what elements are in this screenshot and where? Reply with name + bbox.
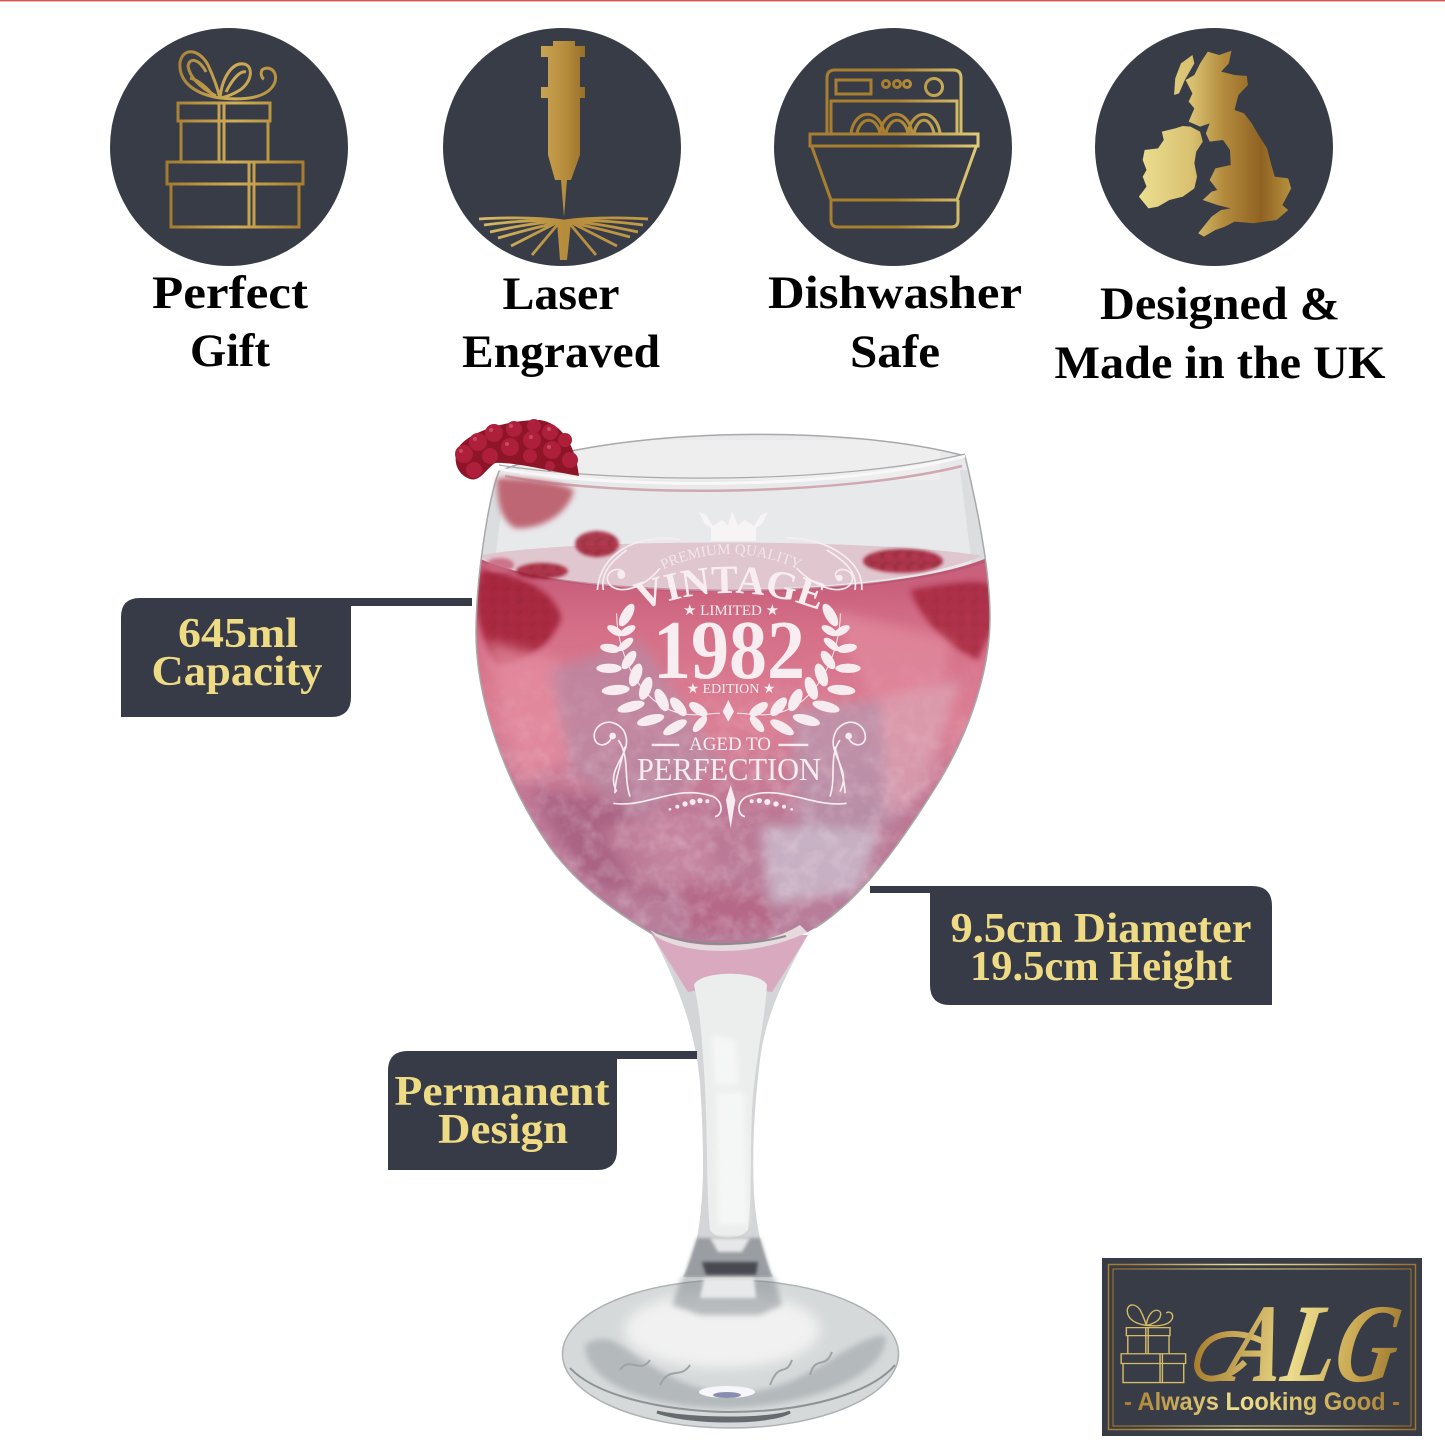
icon: map of UK and Ireland — [1139, 51, 1291, 237]
callout: 645ml capacity — [121, 598, 472, 717]
badge: perfect gift — [110, 28, 348, 266]
stem — [652, 935, 808, 1277]
floating raspberries — [486, 531, 943, 579]
engraved text: VINTAGE — [632, 566, 824, 610]
label: Laser Engraved — [462, 268, 660, 378]
label: Designed and Made in the UK — [1054, 278, 1386, 389]
callout: permanent design: Design — [438, 1107, 568, 1153]
bowl — [470, 425, 1000, 965]
callout: diameter and height: 19.5cm Height — [970, 944, 1232, 990]
engraved text: AGED TO — [689, 734, 771, 755]
raspberry on the rim — [455, 419, 579, 528]
logo gift icon — [1121, 1305, 1186, 1383]
engraved text: ★ EDITION ★ — [687, 682, 775, 697]
liquid surface — [478, 542, 982, 589]
logo tagline: - Always Looking Good - — [1124, 1388, 1400, 1416]
label: Perfect Gift: Perfect — [152, 267, 308, 319]
speckle texture — [501, 701, 968, 940]
engraved text — [632, 544, 824, 787]
thick glass bottom — [650, 925, 807, 951]
label: Perfect Gift: Gift — [190, 325, 270, 377]
callout: 645ml capacity: Capacity — [152, 649, 322, 695]
label: Dishwasher Safe: Safe — [850, 326, 940, 378]
bowl outline and rim — [476, 434, 990, 935]
laurel left — [596, 601, 720, 738]
icon: stacked gifts — [167, 52, 303, 227]
badge: dishwasher safe — [774, 28, 1012, 266]
logo: Always Looking Good — [1102, 1258, 1422, 1436]
crown — [699, 511, 768, 541]
ice cubes — [486, 610, 960, 935]
callout: diameter and height — [870, 886, 1272, 1005]
icon: laser head — [479, 41, 648, 260]
raspberry right inside — [910, 582, 992, 660]
callout: diameter and height: 9.5cm Diameter — [950, 906, 1252, 952]
engraved text: PERFECTION — [637, 751, 821, 787]
flourishes — [594, 538, 865, 817]
label: Perfect Gift — [152, 267, 308, 377]
engraved text: ★ LIMITED ★ — [683, 603, 779, 619]
foot — [562, 1277, 898, 1428]
engraved text: PREMIUM QUALITY — [660, 544, 802, 570]
label: Laser Engraved: Engraved — [462, 326, 660, 378]
badge: laser engraved — [443, 28, 681, 266]
engraved text: 1982 — [653, 604, 805, 697]
label: Dishwasher Safe — [768, 267, 1022, 378]
engraved design: vintage 1982 — [593, 512, 866, 828]
glass with pink drink — [455, 419, 991, 1429]
callout: permanent design: Permanent — [394, 1069, 610, 1115]
raspberry left inside — [477, 570, 561, 664]
icon: dishwasher — [810, 70, 978, 227]
callout: 645ml capacity: 645ml — [178, 611, 298, 657]
label: Designed and Made in the UK: Designed & — [1100, 278, 1340, 330]
badge: designed and made in the UK — [1095, 28, 1333, 266]
label: Designed and Made in the UK: Made in the UK — [1054, 337, 1386, 389]
laurel right — [737, 601, 861, 738]
callout: permanent design — [388, 1051, 697, 1170]
label: Dishwasher Safe: Dishwasher — [768, 267, 1022, 319]
label: Laser Engraved: Laser — [502, 268, 620, 320]
liquid body — [474, 556, 992, 960]
